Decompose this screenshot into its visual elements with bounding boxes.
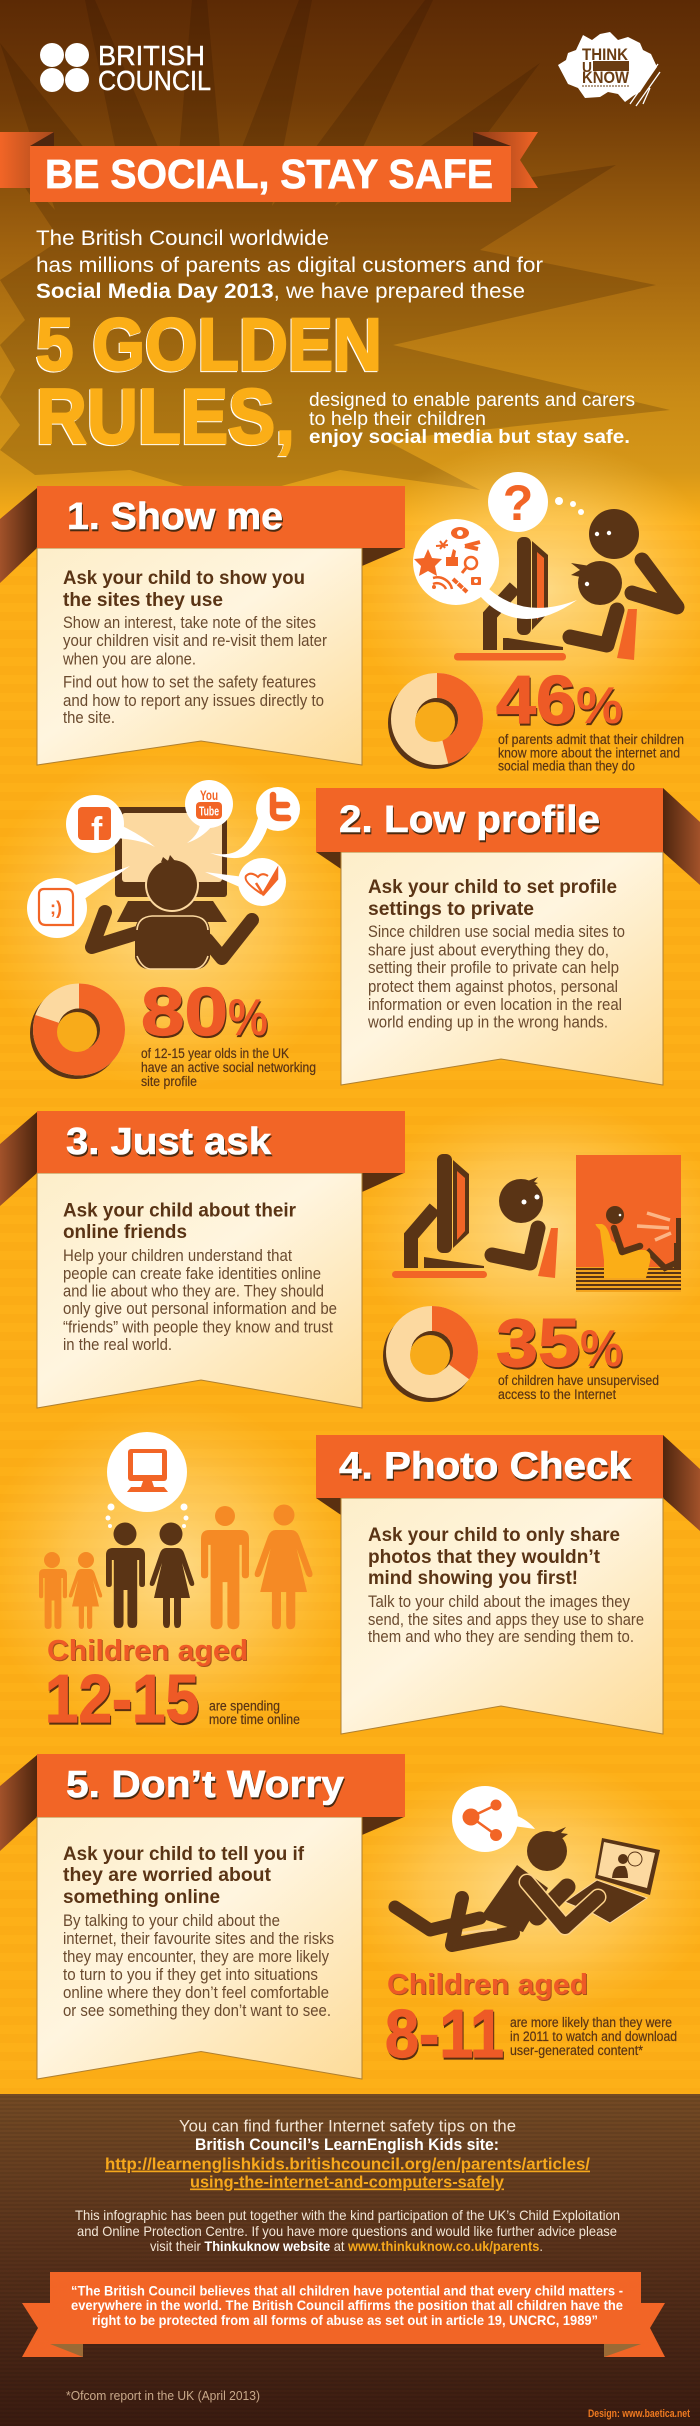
illustration: parent and child at computer — [413, 472, 677, 660]
intro text: has millions of parents as digital customers and for — [36, 254, 543, 277]
stat: 35% — [496, 1305, 659, 1402]
stat: 80%: % — [228, 989, 268, 1047]
icon: question bubble: ? — [503, 475, 533, 531]
panel: rule 1 — [0, 486, 405, 765]
stat: 35%: of children have unsupervised — [498, 1373, 659, 1388]
logo: British Council — [40, 40, 211, 96]
logo: Think U Know — [558, 32, 660, 106]
chart: donut 46% — [388, 677, 480, 769]
heading: 3. Just ask: 3. Just ask — [66, 1121, 272, 1163]
stat: children aged 12-15: are spending — [209, 1699, 280, 1714]
text: rule 5: internet, their favourite sites and the risks — [63, 1930, 334, 1948]
stat: 46%: 46 — [496, 662, 576, 738]
illustration: child at computer — [392, 1154, 558, 1278]
text: participation note — [75, 2207, 620, 2254]
stat: children aged 12-15: 12-15 — [45, 1661, 199, 1737]
heading: 5 golden rules: 5 GOLDEN — [36, 303, 382, 386]
text: rule 2: setting their profile to private can help — [368, 959, 619, 977]
icon: social icons bubble — [413, 519, 577, 619]
intro subtext: enjoy social media but stay safe. — [309, 427, 630, 448]
text: participation note: visit their Thinkuknow website at www.thinkuknow.co.uk/parents. — [150, 2238, 543, 2254]
stat: children aged 8-11: in 2011 to watch and download — [510, 2029, 677, 2044]
title banner: BE SOCIAL, STAY SAFE — [45, 151, 493, 197]
text: participation note: and Online Protection Centre. If you have more questions and would like further advice please — [77, 2223, 617, 2239]
panel: rule 2 — [316, 788, 700, 1085]
text: rule 2 — [367, 877, 625, 1032]
heading: 5 golden rules — [36, 303, 382, 460]
stat: 80%: have an active social networking — [141, 1060, 316, 1075]
panel: rule 5 — [0, 1754, 405, 2079]
text: rule 2: protect them against photos, personal — [368, 978, 618, 996]
intro text: The British Council worldwide — [36, 227, 329, 250]
text: rule 5: By talking to your child about the — [63, 1912, 280, 1930]
logo: British Council: BRITISH — [98, 40, 205, 71]
logo: British Council: COUNCIL — [98, 65, 211, 96]
icon: Facebook: f — [91, 811, 103, 849]
callout: quote banner — [22, 2272, 665, 2357]
text: rule 5 — [63, 1844, 334, 2020]
text: rule 3: in the real world. — [63, 1336, 172, 1354]
text: rule 5: they are worried about — [63, 1865, 272, 1886]
callout: quote banner: “The British Council believes that all children have potential and that every child matters - — [71, 2283, 623, 2299]
text: rule 2: world ending up in the wrong hands. — [367, 1014, 608, 1032]
illustration: child watching TV — [576, 1155, 681, 1292]
text: rule 5: online where they don’t feel comfortable — [63, 1984, 329, 2002]
panel: rule 4 — [316, 1435, 700, 1734]
stat: 80% — [141, 974, 316, 1089]
chart: donut 35% — [383, 1310, 475, 1402]
chart: donut 80% — [30, 987, 122, 1079]
text: rule 2: Ask your child to set profile — [368, 877, 617, 898]
stat: children aged 8-11: user-generated content* — [510, 2043, 644, 2058]
stat: 35%: 35 — [496, 1305, 580, 1381]
text: rule 1: Find out how to set the safety features — [63, 674, 316, 692]
icon: YouTube: Tube — [199, 804, 219, 818]
text: rule 3: Help your children understand that — [63, 1247, 292, 1265]
heading: 5 golden rules: RULES, — [36, 372, 295, 460]
stat: 35%: access to the Internet — [498, 1387, 616, 1402]
text: rule 4: mind showing you first! — [368, 1568, 578, 1589]
stat: 35%: % — [580, 1320, 623, 1378]
text: rule 1: your children visit and re-visit them later — [63, 632, 327, 650]
intro subtext: designed to enable parents and carers — [309, 390, 635, 411]
illustration: family figures — [39, 1504, 313, 1629]
stat: children aged 12-15: more time online — [209, 1712, 300, 1727]
text: further tips: British Council’s LearnEnglish Kids site: — [195, 2136, 499, 2154]
text: further tips: You can find further Internet safety tips on the — [179, 2118, 516, 2136]
text: rule 2: information or even location in the real — [368, 996, 622, 1014]
text: rule 1: Show an interest, take note of the sites — [63, 614, 316, 632]
stat: children aged 8-11: 8-11 — [385, 1996, 504, 2072]
panel: footer — [0, 2094, 700, 2426]
text: rule 5: they may encounter, they are more likely — [63, 1948, 330, 1966]
text: rule 3: Ask your child about their — [63, 1200, 297, 1222]
text: rule 3: online friends — [63, 1222, 187, 1243]
stat: 46%: % — [576, 677, 623, 735]
stat: children aged 8-11: are more likely than they were — [510, 2015, 672, 2030]
panel: rule 3 — [0, 1111, 405, 1408]
intro text: Social Media Day 2013 , we have prepared these — [36, 280, 525, 303]
icon: Twitter — [210, 787, 300, 858]
callout: quote banner: everywhere in the world. The British Council affirms the position that all children have the — [71, 2297, 623, 2313]
text: rule 4: them and who they are sending them to. — [368, 1628, 634, 1646]
text: rule 3 — [63, 1200, 337, 1354]
stat: children aged 8-11 — [385, 1969, 677, 2072]
stat: children aged 12-15: Children aged — [47, 1635, 248, 1667]
intro text — [36, 227, 543, 303]
icon: question bubble — [488, 472, 584, 532]
heading: 2. Low profile: 2. Low profile — [339, 799, 600, 841]
text: rule 5: or see something they don’t want to see. — [63, 2002, 331, 2020]
text: rule 5: to turn to you if they get into situations — [63, 1966, 318, 1984]
text: rule 4: Talk to your child about the images they — [368, 1593, 631, 1611]
text: rule 2: settings to private — [368, 899, 534, 920]
logo: Think U Know: KNOW — [582, 68, 630, 87]
text: further tips: using-the-internet-and-computers-safely — [190, 2174, 505, 2192]
text: rule 3: only give out personal information and be — [63, 1300, 337, 1318]
stat: 46%: social media than they do — [498, 758, 635, 774]
text: rule 3: people can create fake identities online — [63, 1265, 321, 1283]
callout: quote banner: right to be protected from all forms of abuse as set out in article 19, UNCRC, 1989” — [92, 2312, 598, 2328]
intro subtext: to help their children — [309, 409, 486, 430]
stat: 46% — [496, 662, 684, 774]
text: rule 3: and lie about who they are. They should — [63, 1282, 324, 1300]
stat: 46%: know more about the internet and — [498, 746, 680, 760]
text: footnote: *Ofcom report in the UK (April 2013) — [66, 2388, 260, 2403]
icon: YouTube — [185, 780, 233, 843]
text: rule 1: Ask your child to show you — [63, 568, 305, 589]
logo: Think U Know: U — [582, 59, 592, 76]
icon: share bubble — [452, 1786, 535, 1852]
text: rule 5: Ask your child to tell you if — [63, 1844, 305, 1865]
stat: 80%: of 12-15 year olds in the UK — [141, 1046, 289, 1061]
icon: smiley speech: ;) — [50, 898, 62, 918]
text: rule 1: and how to report any issues directly to — [63, 692, 324, 710]
illustration: child surrounded by social media — [27, 780, 300, 969]
stat: children aged 8-11: Children aged — [387, 1969, 588, 2001]
text: rule 2: Since children use social media sites to — [368, 923, 625, 941]
title banner — [0, 132, 538, 202]
text: rule 4: photos that they wouldn’t — [368, 1547, 601, 1568]
heading: 1. Show me: 1. Show me — [67, 496, 283, 538]
text: rule 1: the site. — [63, 709, 115, 727]
stat: children aged 12-15 — [45, 1635, 300, 1737]
icon: computer thought bubble — [106, 1432, 188, 1528]
illustration: child lying with laptop — [395, 1786, 660, 1945]
text: rule 1: when you are alone. — [62, 650, 196, 668]
stat: 80%: 80 — [141, 974, 228, 1050]
text: rule 3: “friends” with people they know and trust — [63, 1318, 333, 1336]
intro subtext — [309, 390, 635, 448]
text: rule 1: the sites they use — [63, 590, 223, 611]
icon: smiley speech — [27, 866, 130, 938]
icon: YouTube: You — [200, 787, 218, 803]
stat: 46%: of parents admit that their children — [498, 732, 684, 747]
text: rule 4: send, the sites and apps they use to share — [368, 1611, 644, 1629]
icon: Facebook — [66, 795, 155, 853]
text: further tips: http://learnenglishkids.britishcouncil.org/en/parents/articles/ — [105, 2156, 590, 2174]
text: rule 4: Ask your child to only share — [368, 1525, 620, 1546]
stat: 80%: site profile — [141, 1074, 197, 1089]
text: participation note: This infographic has been put together with the kind participation of the UK’s Child Exploitation — [75, 2207, 620, 2223]
text: rule 2: share just about everything they do, — [368, 942, 609, 960]
heading: 4. Photo Check: 4. Photo Check — [339, 1446, 632, 1488]
icon: heart check — [205, 858, 286, 906]
text: rule 1 — [62, 568, 327, 727]
logo: Think U Know: THINK — [582, 45, 629, 64]
text: rule 4 — [368, 1525, 644, 1646]
text: further tips — [105, 2118, 590, 2192]
text: rule 5: something online — [63, 1887, 220, 1908]
heading: 5. Don't Worry: 5. Don’t Worry — [66, 1764, 344, 1806]
